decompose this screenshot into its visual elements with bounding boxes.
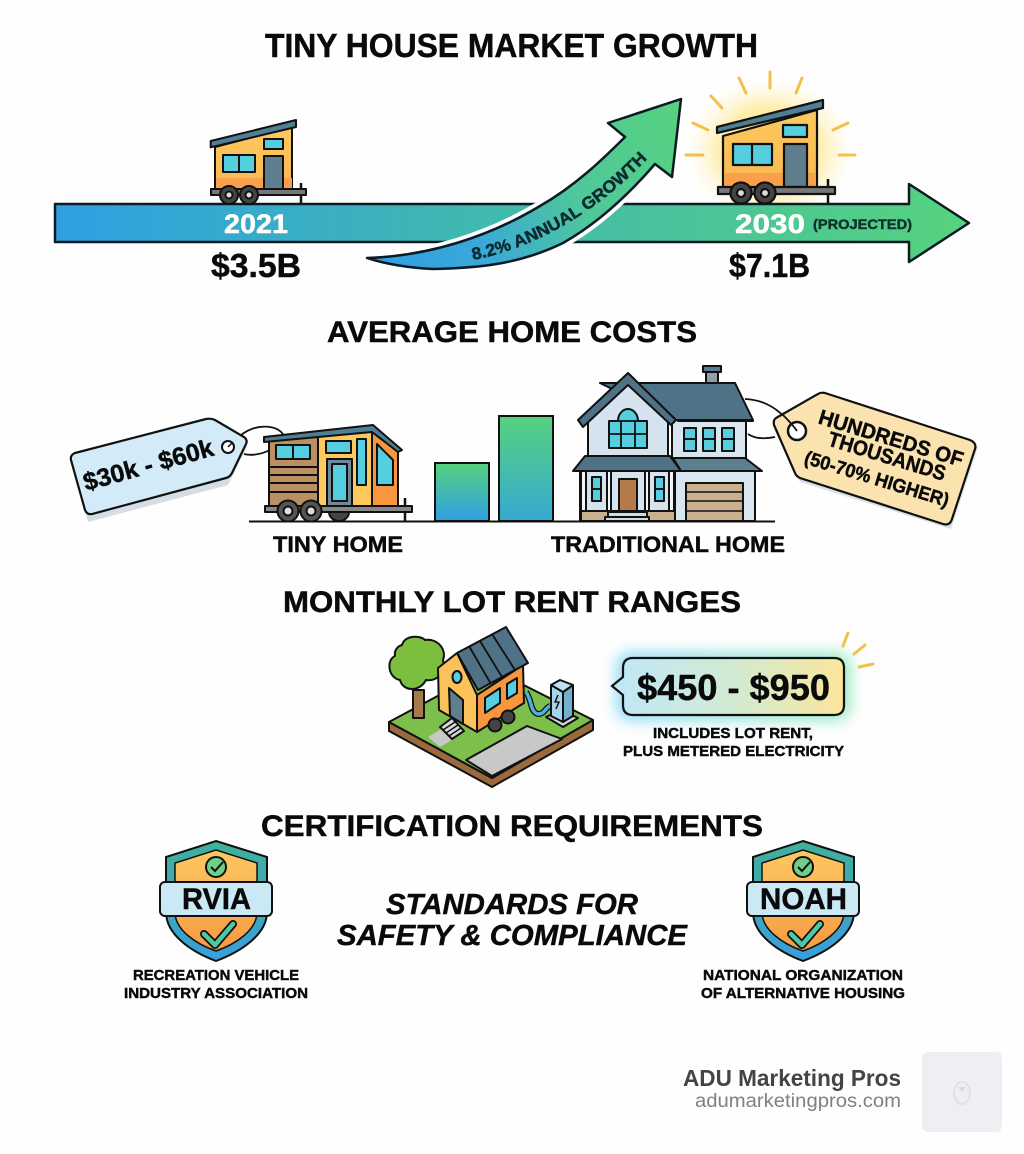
label: 2021: 2021 [224, 209, 288, 239]
heading: certification requirements: CERTIFICATION REQUIREMENTS [261, 810, 763, 843]
callout: rent range: $450 - $950 [637, 667, 830, 708]
growth arrow [366, 98, 682, 270]
icon: sun rays [686, 72, 855, 155]
bar: tiny home cost [435, 463, 489, 521]
badge: NOAH: NOAH [760, 883, 847, 916]
label: national organization of alternative housing: NATIONAL ORGANIZATION [703, 967, 903, 984]
price tag: traditional home [745, 393, 978, 529]
icon: traditional home [573, 366, 762, 521]
label: traditional home: TRADITIONAL HOME [551, 532, 785, 557]
text: standards for safety and compliance [337, 889, 689, 952]
icon: larger tiny house 2030 [717, 100, 835, 204]
panel: certification badges [124, 841, 905, 1002]
price tag: traditional home: (50-70% HIGHER) [802, 448, 951, 512]
icon: tiny home [264, 425, 412, 522]
icon: isometric lot with tiny house [389, 627, 593, 787]
label: tiny home: TINY HOME [273, 532, 403, 557]
text: standards for safety and compliance: STANDARDS FOR [386, 889, 638, 921]
heading: monthly lot rent ranges: MONTHLY LOT RENT RANGES [283, 586, 741, 619]
label: projected: (PROJECTED) [813, 216, 912, 232]
logo placeholder [922, 1052, 1002, 1132]
growth arrow: 8.2% ANNUAL GROWTH [472, 151, 647, 260]
ground line [249, 520, 775, 522]
note: metered electricity: PLUS METERED ELECTRICITY [623, 743, 844, 760]
icon: sun glow behind projected house [686, 78, 854, 222]
timeline arrow [55, 184, 969, 262]
icon: small tiny house 2021 [211, 120, 306, 204]
text: standards for safety and compliance: SAFETY & COMPLIANCE [337, 920, 689, 952]
bar: traditional home cost [499, 416, 553, 521]
price tag: tiny home: $30k - $60k [80, 434, 217, 497]
label: national organization of alternative housing [701, 967, 905, 1002]
badge: NOAH [747, 841, 859, 961]
price tag: traditional home: HUNDREDS OF [816, 406, 966, 472]
label: national organization of alternative housing: OF ALTERNATIVE HOUSING [701, 985, 905, 1002]
note: includes lot rent: INCLUDES LOT RENT, [653, 725, 813, 742]
label: recreation vehicle industry association: RECREATION VEHICLE [133, 967, 299, 984]
badge: RVIA: RVIA [182, 883, 251, 916]
panel: home cost comparison [71, 366, 978, 557]
callout: rent range [612, 658, 844, 715]
badge: RVIA [160, 841, 272, 961]
callout glow [616, 652, 851, 721]
price tag: tiny home [71, 419, 283, 522]
price tag: traditional home: THOUSANDS [825, 428, 949, 486]
icon: callout sparkle [843, 633, 873, 667]
brand name: ADU Marketing Pros [683, 1065, 901, 1091]
value: 2021 market size: $3.5B [211, 247, 301, 284]
panel: monthly lot rent [389, 627, 873, 787]
footer: brand [683, 1052, 1002, 1132]
label: 2030: 2030 [735, 209, 805, 239]
heading: average home costs: AVERAGE HOME COSTS [327, 316, 697, 349]
value: 2030 market size: $7.1B [729, 247, 810, 284]
title: tiny house market growth: TINY HOUSE MARKET GROWTH [265, 27, 758, 64]
label: recreation vehicle industry association: INDUSTRY ASSOCIATION [124, 985, 308, 1002]
label: recreation vehicle industry association [124, 967, 308, 1002]
panel: market growth timeline [54, 70, 970, 284]
brand url: adumarketingpros.com [695, 1091, 901, 1112]
